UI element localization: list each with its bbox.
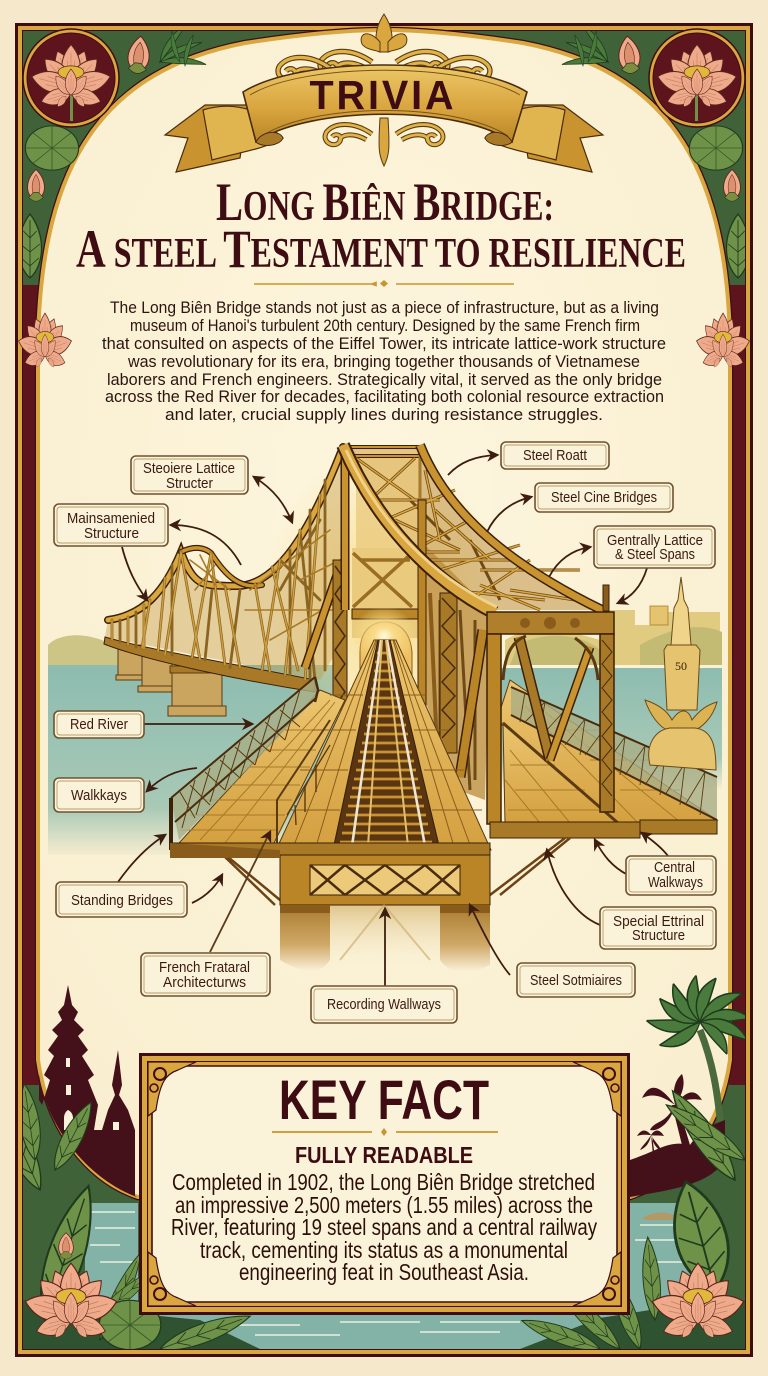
label: Red River: Red River bbox=[70, 717, 128, 733]
label: Walkkays bbox=[54, 778, 144, 812]
panel: key fact box bbox=[139, 1053, 630, 1315]
far bridge piers bbox=[116, 645, 226, 716]
side lotus left bbox=[17, 313, 73, 369]
label: Red River bbox=[54, 711, 144, 738]
label: Recording Wallways: Recording Wallways bbox=[327, 997, 441, 1013]
intro paragraph: was revolutionary for its era, bringing together thousands of Vietnamese bbox=[127, 353, 640, 371]
label: Gentrally Lattice & Steel Spans: Gentrally Lattice bbox=[607, 533, 703, 549]
bottom-left foliage bbox=[23, 1082, 260, 1349]
background river and trees bbox=[48, 665, 338, 855]
central portal bbox=[352, 548, 418, 720]
far bridge truss fill bbox=[105, 447, 343, 680]
bottom river bbox=[85, 1203, 700, 1349]
label: French Frataral Architecturws bbox=[141, 953, 270, 996]
monument: 50 bbox=[675, 659, 687, 673]
heading: trivia: TRIVIA bbox=[310, 72, 456, 118]
label: Steel Roatt bbox=[501, 442, 609, 469]
label: Recording Wallways bbox=[311, 986, 457, 1023]
key fact text bbox=[171, 1169, 597, 1285]
temple silhouette bbox=[39, 985, 137, 1197]
temple windows bbox=[64, 1058, 119, 1130]
top-right spandrel foliage bbox=[561, 22, 750, 278]
label: Central Walkways bbox=[626, 856, 716, 895]
intro paragraph: The Long Biên Bridge stands not just as a piece of infrastructure, but as a living bbox=[110, 299, 659, 317]
label: Steoiere Lattice Structer bbox=[131, 456, 248, 494]
key fact text: engineering feat in Southeast Asia. bbox=[239, 1259, 529, 1285]
right walkways bbox=[497, 680, 717, 825]
label: French Frataral Architecturws: Architecturws bbox=[163, 975, 246, 991]
monument bbox=[645, 577, 717, 770]
label: Special Ettrinal Structure: Structure bbox=[632, 928, 685, 944]
key fact text: River, featuring 19 steel spans and a central railway bbox=[171, 1214, 597, 1240]
label: Steoiere Lattice Structer: Structer bbox=[166, 476, 213, 492]
label: Mainsamenied Structure: Structure bbox=[84, 526, 139, 542]
label: Steoiere Lattice Structer: Steoiere Lattice bbox=[143, 461, 235, 477]
label: Special Ettrinal Structure: Special Ettrinal bbox=[613, 914, 704, 930]
label: Walkkays: Walkkays bbox=[71, 788, 127, 804]
tower back truss bbox=[343, 445, 602, 800]
label: Standing Bridges bbox=[56, 882, 187, 917]
bridge illustration bbox=[48, 445, 722, 972]
label: Standing Bridges: Standing Bridges bbox=[71, 893, 173, 909]
fleur de lis top ornament bbox=[278, 14, 490, 80]
label: French Frataral Architecturws: French Frataral bbox=[159, 960, 250, 976]
palm trees bbox=[630, 975, 752, 1197]
divider bbox=[272, 1128, 498, 1136]
subheading: FULLY READABLE bbox=[295, 1142, 473, 1168]
label: Steel Sotmiaires bbox=[517, 963, 635, 997]
arrows bbox=[118, 455, 668, 986]
corner ornaments bbox=[148, 1062, 621, 1306]
label: Central Walkways: Walkways bbox=[648, 875, 703, 891]
ribbon tails bbox=[165, 105, 248, 172]
tower columns bbox=[333, 447, 483, 777]
title bbox=[76, 172, 686, 279]
banner: trivia ribbon bbox=[165, 14, 603, 172]
centre decks bbox=[276, 640, 491, 850]
intro paragraph bbox=[102, 299, 666, 424]
key fact text: an impressive 2,500 meters (1.55 miles) across the bbox=[175, 1192, 593, 1218]
ribbon main bbox=[243, 65, 527, 142]
label: Mainsamenied Structure: Mainsamenied bbox=[67, 511, 155, 527]
far bridge truss bbox=[104, 447, 343, 692]
top-left spandrel foliage bbox=[18, 22, 207, 278]
medallion: right lotus bbox=[649, 29, 745, 127]
lower ornament bbox=[325, 124, 372, 145]
key fact heading: KEY FACT bbox=[279, 1068, 489, 1131]
label: Gentrally Lattice & Steel Spans bbox=[594, 526, 715, 568]
label: Steel Roatt: Steel Roatt bbox=[523, 448, 587, 464]
panel: cream arch bbox=[38, 30, 730, 1197]
bottom-right foliage bbox=[519, 1084, 750, 1357]
key fact text: track, cementing its status as a monumental bbox=[200, 1237, 568, 1263]
side lotus right bbox=[695, 313, 751, 369]
left lattice strut bbox=[305, 563, 341, 668]
label: Steel Sotmiaires: Steel Sotmiaires bbox=[530, 973, 622, 989]
intro paragraph: and later, crucial supply lines during resistance struggles. bbox=[165, 406, 603, 424]
divider bbox=[254, 280, 514, 287]
label: Gentrally Lattice & Steel Spans: & Steel Spans bbox=[615, 547, 695, 563]
medallion: left lotus bbox=[23, 29, 119, 127]
front portal bbox=[343, 445, 614, 824]
label: Special Ettrinal Structure bbox=[600, 907, 716, 949]
intro paragraph: across the Red River for decades, facilitating both colonial resource extraction bbox=[105, 388, 664, 406]
key fact text: Completed in 1902, the Long Biên Bridge stretched bbox=[172, 1169, 595, 1195]
intro paragraph: laborers and French engineers. Strategically vital, it served as the only bridge bbox=[107, 371, 662, 389]
label: Central Walkways: Central bbox=[654, 860, 695, 876]
intro paragraph: museum of Hanoi's turbulent 20th century. Designed by the same French firm bbox=[130, 317, 640, 335]
left walkway and railing bbox=[171, 677, 345, 850]
intro paragraph: that consulted on aspects of the Eiffel Tower, its intricate lattice-work structure bbox=[102, 335, 666, 353]
title: LONG BIÊN BRIDGE: bbox=[216, 172, 554, 232]
label: Mainsamenied Structure bbox=[54, 504, 168, 546]
label: Steel Cine Bridges bbox=[535, 483, 673, 512]
label: Steel Cine Bridges: Steel Cine Bridges bbox=[551, 490, 657, 506]
front deck edge and substructure bbox=[170, 820, 717, 972]
